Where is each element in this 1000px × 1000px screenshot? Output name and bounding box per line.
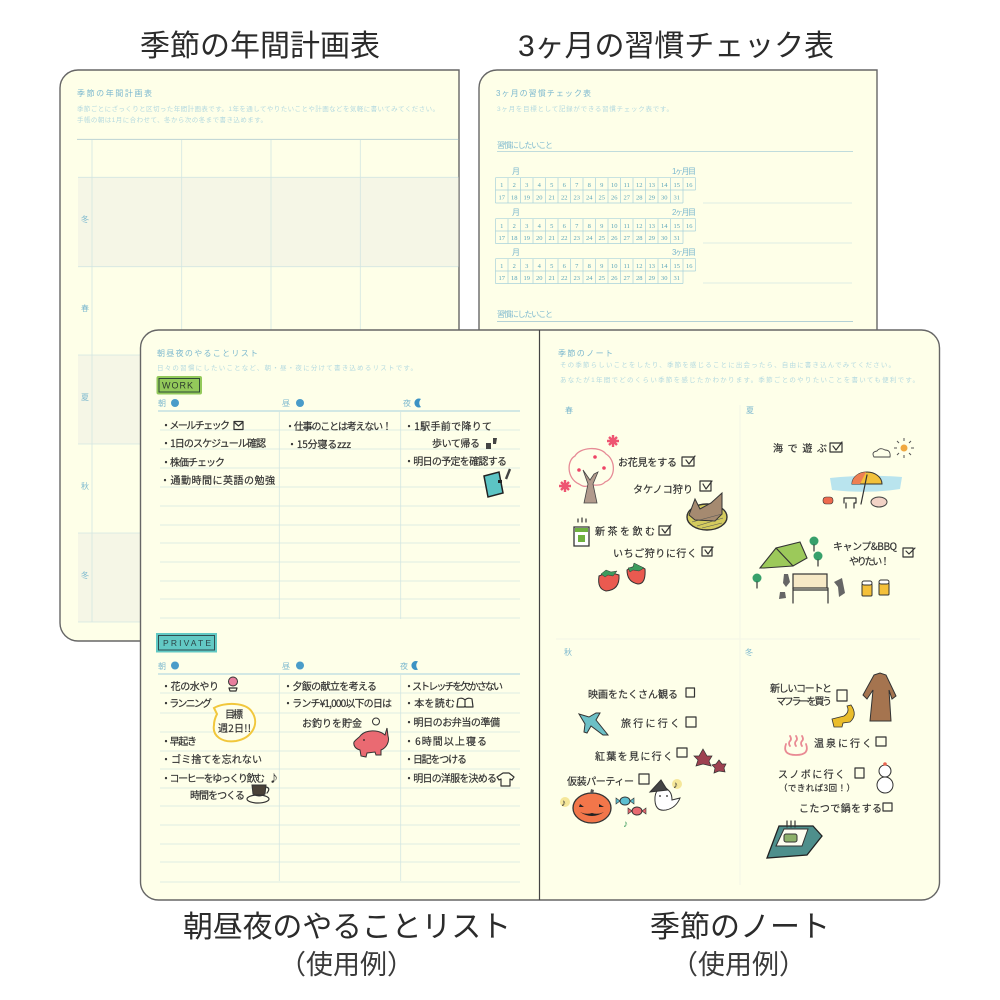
calendar 3: 26 xyxy=(611,275,618,282)
calendar 2: 10 xyxy=(611,223,618,230)
icon: ghost with hat xyxy=(650,780,680,810)
autumn notes: 仮装パーティー xyxy=(567,773,634,788)
summer notes: 海で遊ぶ xyxy=(773,440,827,455)
icon: bamboo shoot basket xyxy=(687,493,727,530)
calendar 2: 2 xyxy=(513,223,516,230)
icon: airplane xyxy=(579,713,608,735)
spring notes: いちご狩りに行く xyxy=(613,545,697,560)
calendar 3: 31 xyxy=(674,275,680,282)
winter notes: 新しいコートと xyxy=(770,680,832,695)
habit label 1: 習慣にしたいこと xyxy=(497,140,553,150)
WORK night list: ・1駅手前で降りて xyxy=(404,418,492,433)
page description: seasonal notes xyxy=(560,360,919,384)
yearly plan grid: 秋 xyxy=(81,481,89,491)
season labels: 夏 xyxy=(746,406,754,415)
page title: to-do list: 朝昼夜のやることリスト xyxy=(157,349,258,358)
calendar 1: 9 xyxy=(600,182,603,189)
calendar 1: 14 xyxy=(661,182,668,189)
calendar 2: 3 xyxy=(525,223,528,230)
calendar 3: 7 xyxy=(575,263,579,270)
calendar 2: 17 xyxy=(499,235,506,242)
calendar 1: 24 xyxy=(586,194,593,202)
panel: habit check page xyxy=(479,70,877,340)
PRIVATE noon list: ・夕飯の献立を考える xyxy=(283,678,377,693)
calendar 3: 18 xyxy=(511,275,518,282)
PRIVATE morning list: ・ランニング xyxy=(161,695,212,710)
PRIVATE noon list: お釣りを貯金 xyxy=(302,715,362,730)
summer notes xyxy=(773,440,915,568)
calendar 1: 2 xyxy=(513,182,516,189)
calendar 1: 18 xyxy=(511,194,518,202)
icon: camping scene xyxy=(752,536,889,603)
winter notes: スノボに行く xyxy=(778,766,845,781)
PRIVATE stamp: PRIVATE xyxy=(163,638,211,648)
page description: to-do list: 日々の習慣にしたいことなど、朝・昼・夜に分けて書き込めるリストです。 xyxy=(157,363,417,372)
calendar 1 xyxy=(496,152,853,203)
icon: candies xyxy=(616,797,646,815)
calendar 1: 26 xyxy=(611,194,618,202)
WORK noon list xyxy=(285,418,392,451)
calendar 2: 11 xyxy=(624,223,630,230)
panel: yearly plan page xyxy=(60,70,459,641)
spring notes xyxy=(595,454,713,560)
calendar 2: 7 xyxy=(575,223,579,230)
yearly plan grid: 春 xyxy=(81,303,89,313)
calendar 3: 1 xyxy=(500,263,503,270)
calendar 1: 30 xyxy=(661,194,668,202)
calendar 1: 25 xyxy=(599,194,605,202)
icon: teal notebook and pencil xyxy=(484,469,510,497)
PRIVATE morning list: ♪ xyxy=(269,770,279,785)
summer notes: やりたい！ xyxy=(849,553,890,568)
icon: music notes: ♪ xyxy=(623,819,628,830)
calendar 1: 20 xyxy=(536,194,543,202)
calendar 2: 25 xyxy=(599,235,605,242)
calendar 2: 15 xyxy=(674,223,680,230)
PRIVATE night list: ・ストレッチを欠かさない xyxy=(404,678,503,693)
PRIVATE morning list: ・花の水やり xyxy=(161,678,219,693)
yearly plan description xyxy=(77,104,439,124)
WORK morning list: ・1日のスケジュール確認 xyxy=(161,435,266,450)
WORK morning list xyxy=(160,417,275,487)
calendar 2: 19 xyxy=(524,235,530,242)
PRIVATE stamp xyxy=(156,633,217,652)
season labels: 春 xyxy=(565,405,573,415)
summer notes: キャンプ&BBQ xyxy=(833,538,897,553)
page description: seasonal notes: あなたが1年間でどのくらい季節を感じたかわかります。季節ごとのやりたいことを書いても便利です。 xyxy=(560,375,919,384)
calendar 3: 2 xyxy=(513,263,516,270)
calendar 1: 28 xyxy=(636,194,643,202)
calendar 2: 24 xyxy=(586,235,593,242)
WORK night list: 歩いて帰る xyxy=(432,435,480,450)
calendar 2: 1 xyxy=(500,223,503,230)
PRIVATE morning list: 時間をつくる xyxy=(190,787,245,802)
icon: flower pot xyxy=(228,677,238,691)
calendar 2: 31 xyxy=(674,235,680,242)
calendar 2: 20 xyxy=(536,235,543,242)
calendar 3: 3 xyxy=(525,263,528,270)
PRIVATE table lines xyxy=(158,674,520,882)
callout: goal bubble xyxy=(214,704,255,741)
PRIVATE morning list: ・ゴミ捨てを忘れない xyxy=(161,751,262,766)
icon: cherry tree xyxy=(559,435,619,503)
calendar 1: 23 xyxy=(574,194,580,202)
caption: usage example left: （使用例） xyxy=(279,950,414,980)
calendar 2: 28 xyxy=(636,235,643,242)
icon: coffee cup xyxy=(247,785,269,803)
PRIVATE morning list: ・コーヒーをゆっくり飲む xyxy=(161,770,265,785)
calendar 3: 12 xyxy=(636,263,643,270)
PRIVATE morning list: ・早起き xyxy=(161,733,197,748)
calendar 3: 10 xyxy=(611,263,618,270)
calendar 1: 3 xyxy=(525,182,528,189)
season labels: 冬 xyxy=(745,647,753,657)
calendar 1: 5 xyxy=(550,182,553,189)
calendar 1: 12 xyxy=(636,182,643,189)
heading: to-do list: 朝昼夜のやることリスト xyxy=(183,911,511,944)
winter notes: マフラーを買う xyxy=(776,693,832,708)
calendar 1: 8 xyxy=(588,182,591,189)
icon: maple leaves xyxy=(694,749,726,773)
PRIVATE night list: ・本を読む xyxy=(404,695,455,710)
habit title: 3ヶ月の習慣チェック表 xyxy=(496,88,591,98)
icon: music notes: ♪ xyxy=(561,798,566,809)
icon: trench coat xyxy=(863,673,896,721)
icon: tea cup xyxy=(574,518,589,546)
WORK morning list: ・株価チェック xyxy=(161,454,225,469)
yearly plan title: 季節の年間計画表 xyxy=(77,88,152,98)
calendar 1: 月 xyxy=(512,167,520,176)
PRIVATE night list: ・明日の洋服を決める xyxy=(404,770,497,785)
WORK column headers: 夜 xyxy=(403,399,411,408)
calendar 3: 14 xyxy=(661,263,668,270)
calendar 1: 11 xyxy=(624,182,630,189)
icon: pumpkin xyxy=(573,789,611,823)
calendar 1: 16 xyxy=(686,182,693,189)
WORK column headers: 昼 xyxy=(282,399,290,408)
calendar 3: 6 xyxy=(563,263,567,270)
calendar 2: 2ヶ月目 xyxy=(672,208,696,217)
calendar 2: 13 xyxy=(649,223,655,230)
calendar 1: 31 xyxy=(674,194,680,202)
spring notes: お花見をする xyxy=(618,454,677,469)
page title: seasonal notes: 季節のノート xyxy=(558,348,613,358)
icon: strawberries xyxy=(599,563,645,591)
calendar 1: 29 xyxy=(649,194,655,202)
calendar 2: 8 xyxy=(588,223,591,230)
calendar 2: 9 xyxy=(600,223,603,230)
calendar 2: 26 xyxy=(611,235,618,242)
calendar 3: 25 xyxy=(599,275,605,282)
panel: open notebook spread xyxy=(140,330,940,900)
calendar 3: 29 xyxy=(649,275,655,282)
calendar 3: 17 xyxy=(499,275,506,282)
PRIVATE column headers: 夜 xyxy=(400,662,408,671)
calendar 1: 7 xyxy=(575,182,579,189)
yearly plan grid: 夏 xyxy=(81,393,89,402)
calendar 3: 23 xyxy=(574,275,580,282)
PRIVATE column headers xyxy=(158,661,418,671)
spring notes: タケノコ狩り xyxy=(633,481,693,496)
calendar 2: 29 xyxy=(649,235,655,242)
callout: goal bubble: 週2日!! xyxy=(218,720,251,735)
calendar 3: 15 xyxy=(674,263,680,270)
autumn notes: 映画をたくさん観る xyxy=(588,686,678,701)
calendar 3: 11 xyxy=(624,263,630,270)
PRIVATE morning list xyxy=(161,678,279,802)
calendar 2: 23 xyxy=(574,235,580,242)
yearly plan grid: 冬 xyxy=(81,570,89,580)
calendar 3: 28 xyxy=(636,275,643,282)
caption: usage example right: （使用例） xyxy=(671,950,806,980)
icon: scarf xyxy=(832,705,854,727)
PRIVATE night list: ・明日のお弁当の準備 xyxy=(404,714,500,729)
calendar 1: 22 xyxy=(561,194,568,202)
winter notes xyxy=(770,680,892,815)
calendar 1: 17 xyxy=(499,194,506,202)
winter notes: 温泉に行く xyxy=(814,735,872,750)
calendar 2: 6 xyxy=(563,223,567,230)
season labels: 秋 xyxy=(564,647,572,657)
calendar 2: 18 xyxy=(511,235,518,242)
yearly plan description: 季節ごとにざっくりと区切った年間計画表です。1年を通してやりたいことや計画などを気軽に書いてみてください。 xyxy=(77,104,439,113)
WORK column headers: 朝 xyxy=(158,399,166,408)
heading: yearly plan: 季節の年間計画表 xyxy=(140,30,380,63)
calendar 3: 21 xyxy=(549,275,555,282)
calendar 2: 21 xyxy=(549,235,555,242)
PRIVATE night list: ・6時間以上寝る xyxy=(404,733,487,748)
PRIVATE noon list: ・ランチ¥1,000以下の日は xyxy=(283,695,392,710)
habit description: 3ヶ月を目標として記録ができる習慣チェック表です。 xyxy=(497,104,673,113)
calendar 1: 10 xyxy=(611,182,618,189)
yearly plan grid xyxy=(77,139,458,622)
calendar 3: 16 xyxy=(686,263,693,270)
WORK noon list: ・15分寝るzzz xyxy=(287,436,351,451)
calendar 2: 22 xyxy=(561,235,568,242)
calendar 2: 5 xyxy=(550,223,553,230)
calendar 3: 9 xyxy=(600,263,603,270)
calendar 3: 24 xyxy=(586,275,593,282)
PRIVATE night list xyxy=(404,678,514,786)
calendar 1: 21 xyxy=(549,194,555,202)
autumn notes xyxy=(567,686,696,788)
callout: goal bubble: 目標 xyxy=(225,706,243,721)
calendar 2: 16 xyxy=(686,223,693,230)
PRIVATE column headers: 昼 xyxy=(282,662,290,671)
calendar 3: 27 xyxy=(624,275,631,282)
PRIVATE column headers: 朝 xyxy=(158,662,166,671)
calendar 1: 1 xyxy=(500,182,503,189)
calendar 2: 27 xyxy=(624,235,631,242)
icon: music notes xyxy=(560,779,682,830)
icon: onsen mark xyxy=(785,736,807,755)
calendar 1: 19 xyxy=(524,194,530,202)
PRIVATE noon list xyxy=(283,678,392,730)
icon: snowman xyxy=(877,762,893,793)
yearly plan grid: 冬 xyxy=(81,214,89,224)
PRIVATE night list: ・日記をつける xyxy=(404,751,467,766)
calendar 3: 3ヶ月目 xyxy=(672,248,696,257)
calendar 3 xyxy=(496,248,852,284)
habit label 2: 習慣にしたいこと xyxy=(497,309,553,319)
WORK stamp: WORK xyxy=(162,380,193,390)
calendar 3: 22 xyxy=(561,275,568,282)
calendar 3: 月 xyxy=(512,248,520,257)
calendar 1: 1ヶ月目 xyxy=(672,167,696,176)
calendar 3: 4 xyxy=(538,263,542,270)
icon: kotatsu hot pot xyxy=(767,821,822,858)
calendar 1: 27 xyxy=(624,194,631,202)
spring notes: 新茶を飲む xyxy=(595,523,655,538)
calendar 3: 20 xyxy=(536,275,543,282)
heading: habit check: 3ヶ月の習慣チェック表 xyxy=(518,30,834,63)
WORK table lines xyxy=(158,411,520,619)
WORK column headers xyxy=(158,399,421,408)
calendar 1: 6 xyxy=(563,182,567,189)
calendar 1: 15 xyxy=(674,182,680,189)
icon: piggy bank xyxy=(354,718,389,757)
WORK night list xyxy=(404,418,507,468)
calendar 2: 4 xyxy=(538,223,542,230)
autumn notes: 紅葉を見に行く xyxy=(595,748,673,763)
WORK morning list: ・メールチェック xyxy=(161,417,230,432)
yearly plan description: 手帳の朝は1月に合わせて、冬から次の冬まで書き込めます。 xyxy=(77,115,267,124)
calendar 3: 8 xyxy=(588,263,591,270)
calendar 3: 19 xyxy=(524,275,530,282)
calendar 2: 30 xyxy=(661,235,668,242)
calendar 2 xyxy=(496,208,852,244)
page description: seasonal notes: その季節らしいことをしたり、季節を感じることに出会ったら、自由に書き込んでみてください。 xyxy=(560,360,895,369)
autumn notes: 旅行に行く xyxy=(621,715,680,730)
winter notes: こたつで鍋をする xyxy=(799,800,882,815)
WORK noon list: ・仕事のことは考えない！ xyxy=(285,418,392,433)
calendar 3: 13 xyxy=(649,263,655,270)
season labels xyxy=(556,405,920,885)
WORK stamp xyxy=(156,376,202,394)
icon: beach scene xyxy=(823,438,914,508)
heading: seasonal notes: 季節のノート xyxy=(650,911,830,944)
calendar 1: 13 xyxy=(649,182,655,189)
calendar 1: 4 xyxy=(538,182,542,189)
calendar 3: 5 xyxy=(550,263,553,270)
calendar 2: 月 xyxy=(512,208,520,217)
winter notes: （できれば3回！） xyxy=(779,782,855,794)
WORK morning list: ・通勤時間に英語の勉強 xyxy=(160,472,275,487)
icon: music notes: ♪ xyxy=(673,780,678,791)
calendar 3: 30 xyxy=(661,275,668,282)
calendar 2: 14 xyxy=(661,223,668,230)
WORK night list: ・明日の予定を確認する xyxy=(404,453,507,468)
calendar 2: 12 xyxy=(636,223,643,230)
